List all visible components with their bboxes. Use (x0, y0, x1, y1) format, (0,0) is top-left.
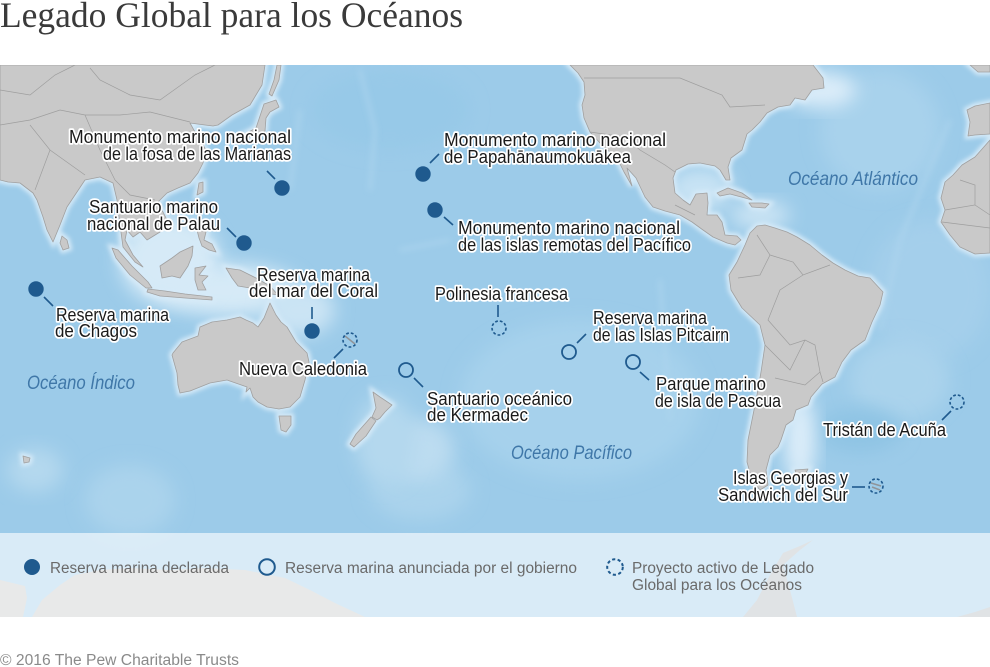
site labels: Santuario marino (89, 196, 218, 217)
ocean labels: Océano Pacífico (511, 442, 632, 464)
site labels: de Papahānaumokuākea (444, 146, 632, 167)
site labels: nacional de Palau (87, 213, 220, 234)
ocean labels: Océano Índico (27, 371, 135, 394)
site labels: Islas Georgias y (733, 467, 849, 488)
site labels: de las Islas Pitcairn (593, 324, 729, 345)
markers: declared reserves (28, 166, 443, 339)
site labels: Nueva Caledonia (239, 358, 368, 379)
coastal shelf glow (0, 65, 990, 490)
site labels: Sandwich del Sur (718, 484, 848, 505)
site labels: Monumento marino nacional (444, 129, 666, 150)
site labels: Monumento marino nacional (458, 217, 680, 238)
legend: Proyecto activo de Legado (632, 560, 814, 577)
site labels: de Kermadec (427, 404, 528, 425)
site labels: Reserva marina (56, 304, 170, 325)
markers: announced reserves (399, 345, 640, 377)
site labels: Polinesia francesa (435, 283, 569, 304)
site labels: Reserva marina (257, 264, 371, 285)
site labels: Tristán de Acuña (823, 419, 947, 440)
leader lines (44, 154, 951, 487)
legend (24, 559, 814, 594)
site labels (55, 126, 947, 505)
legend overlay band with Antarctica (0, 533, 990, 617)
site labels: Monumento marino nacional (69, 126, 291, 147)
ocean labels: Océano Atlántico (788, 168, 918, 190)
site labels: de las islas remotas del Pacífico (458, 234, 691, 255)
island details inside project markers (345, 336, 881, 490)
site labels: Reserva marina (593, 307, 708, 328)
site labels: de Chagos (55, 320, 137, 341)
site labels: Parque marino (656, 373, 766, 394)
markers: active projects (343, 321, 964, 493)
site labels: del mar del Coral (249, 280, 378, 301)
site labels: de la fosa de las Marianas (103, 143, 291, 164)
country borders (0, 65, 990, 385)
ocean labels (27, 168, 918, 464)
legend: Reserva marina anunciada por el gobierno (285, 560, 577, 577)
site labels: de isla de Pascua (655, 390, 782, 411)
land masses (0, 65, 990, 490)
ocean bathymetry shading (7, 70, 990, 535)
legend: Reserva marina declarada (50, 560, 229, 577)
legend: Global para los Océanos (632, 577, 802, 594)
site labels: Santuario oceánico (427, 388, 572, 409)
